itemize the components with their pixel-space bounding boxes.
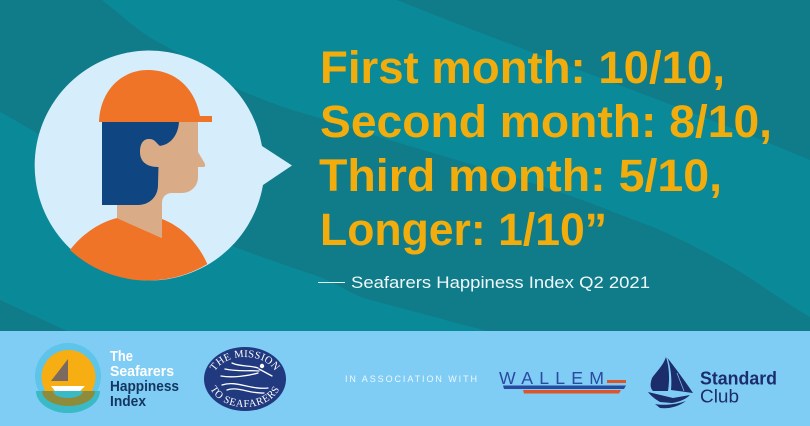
ear	[140, 139, 162, 167]
icon: seafarer portrait in speech bubble	[35, 50, 292, 290]
logo wordmark	[110, 348, 179, 410]
panel: footer band	[0, 331, 810, 426]
logo: The Mission to Seafarers: THE MISSION	[209, 350, 280, 370]
speech bubble	[35, 50, 292, 280]
quote line 2: Second month: 8/10,	[320, 96, 772, 147]
logo emblem	[35, 343, 101, 413]
logo: The Seafarers Happiness Index	[35, 343, 179, 413]
association label: IN ASSOCIATION WITH	[345, 374, 477, 384]
logo: Standard Club: Standard	[700, 368, 777, 388]
logo: Standard Club: Club	[700, 386, 739, 406]
quote text	[319, 42, 772, 255]
source attribution: Seafarers Happiness Index Q2 2021	[351, 273, 650, 292]
logo: Wallem	[499, 368, 626, 394]
logo: Standard Club	[648, 357, 777, 408]
logo wordmark: Seafarers	[110, 363, 174, 380]
panel: teal background with diagonal bands	[0, 0, 810, 331]
quote line 1: First month: 10/10,	[320, 42, 725, 93]
logo wordmark: Happiness	[110, 378, 179, 395]
ship icon	[648, 357, 693, 408]
hair	[102, 122, 179, 205]
logo: The Mission to Seafarers	[204, 347, 286, 411]
neck and face	[117, 120, 205, 238]
logo wordmark: The	[110, 348, 133, 365]
quote line 3: Third month: 5/10,	[319, 150, 722, 201]
logo wordmark: Index	[110, 393, 147, 410]
logo: The Mission to Seafarers: TO SEAFARERS	[210, 385, 278, 408]
logo: Wallem: WALLEM	[499, 368, 610, 388]
quote line 4: Longer: 1/10”	[320, 204, 607, 255]
shirt	[70, 218, 208, 280]
hard hat	[99, 70, 212, 122]
